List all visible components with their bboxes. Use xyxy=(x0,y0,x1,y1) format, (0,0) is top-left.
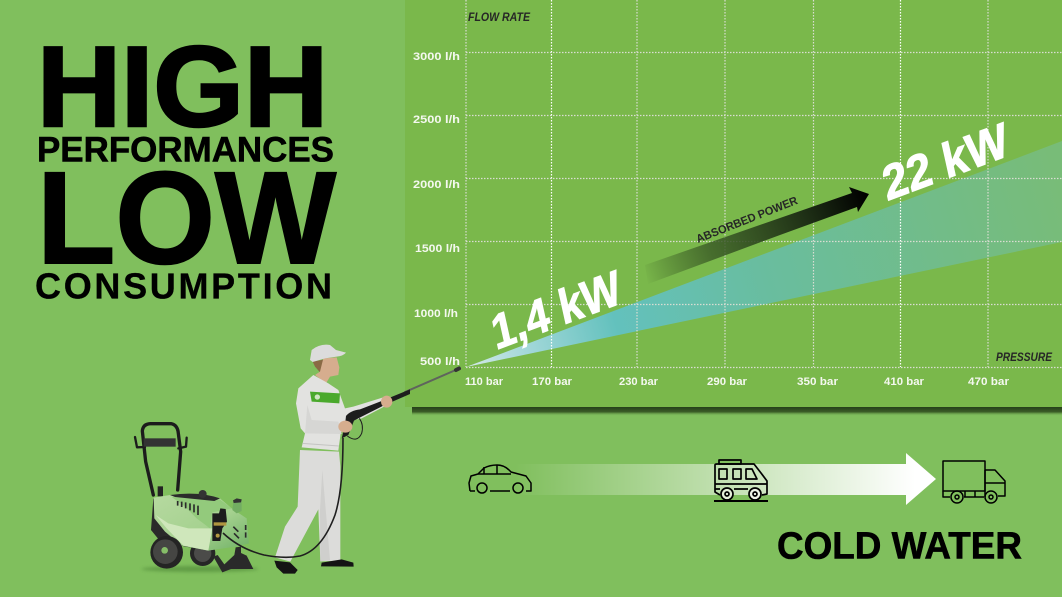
x axis labels: 230 bar xyxy=(619,376,659,388)
hose xyxy=(223,438,343,557)
y axis labels: 2500 l/h xyxy=(413,114,460,126)
chart panel xyxy=(405,0,1062,407)
y axis labels: 500 l/h xyxy=(420,356,460,368)
vehicle scale arrow xyxy=(515,453,936,505)
worker trousers and shoes xyxy=(274,450,354,574)
worker right shoe xyxy=(321,559,354,567)
title xyxy=(35,24,336,306)
hair xyxy=(313,359,325,372)
x axis labels: 170 bar xyxy=(532,376,573,388)
absorbed power label: ABSORBED POWER xyxy=(695,195,800,246)
title line: LOW: LOW xyxy=(37,144,336,291)
x axis labels: 110 bar xyxy=(465,376,504,388)
title line: HIGH: HIGH xyxy=(37,24,328,151)
x axis labels: 350 bar xyxy=(797,376,839,388)
icon: van xyxy=(714,460,768,501)
absorbed power arrow xyxy=(645,187,869,284)
machine stand xyxy=(213,547,253,572)
chart shadow xyxy=(412,407,1062,416)
pressure washer machine xyxy=(135,424,258,572)
lance xyxy=(405,368,459,392)
icon: truck xyxy=(943,461,1005,503)
x axis title: PRESSURE xyxy=(996,352,1052,364)
x axis labels xyxy=(465,376,1010,388)
jacket green band xyxy=(310,392,340,403)
worker jacket xyxy=(296,375,387,451)
x axis labels: 290 bar xyxy=(707,376,748,388)
water spray cone xyxy=(466,141,1062,367)
value: 22 kW: 22 kW xyxy=(878,112,1013,212)
x axis labels: 470 bar xyxy=(968,376,1010,388)
y axis labels: 3000 l/h xyxy=(413,51,460,63)
machine body xyxy=(151,498,208,550)
chart grid xyxy=(466,0,1062,368)
worker hands xyxy=(338,396,392,433)
value: 1,4 kW: 1,4 kW xyxy=(487,260,626,361)
machine handle xyxy=(135,424,187,495)
title line: PERFORMANCES: PERFORMANCES xyxy=(37,130,334,170)
cold water label: COLD WATER xyxy=(777,526,1022,568)
machine pump xyxy=(212,508,227,541)
title line: CONSUMPTION: CONSUMPTION xyxy=(35,266,332,306)
machine vents xyxy=(178,501,246,538)
worker left shoe xyxy=(274,561,298,574)
y axis labels xyxy=(413,51,460,368)
face xyxy=(315,357,339,383)
worker cap xyxy=(310,345,346,362)
machine ground shadow xyxy=(142,566,258,572)
icon: car xyxy=(469,465,531,493)
y axis labels: 1500 l/h xyxy=(415,243,460,255)
x axis labels: 410 bar xyxy=(884,376,925,388)
rear wheel xyxy=(190,541,215,566)
y axis labels: 1000 l/h xyxy=(414,308,458,320)
front wheel xyxy=(150,536,183,569)
y axis title: FLOW RATE xyxy=(468,12,530,24)
worker upper body xyxy=(296,345,410,451)
spray gun xyxy=(342,389,410,438)
y axis labels: 2000 l/h xyxy=(413,179,460,191)
